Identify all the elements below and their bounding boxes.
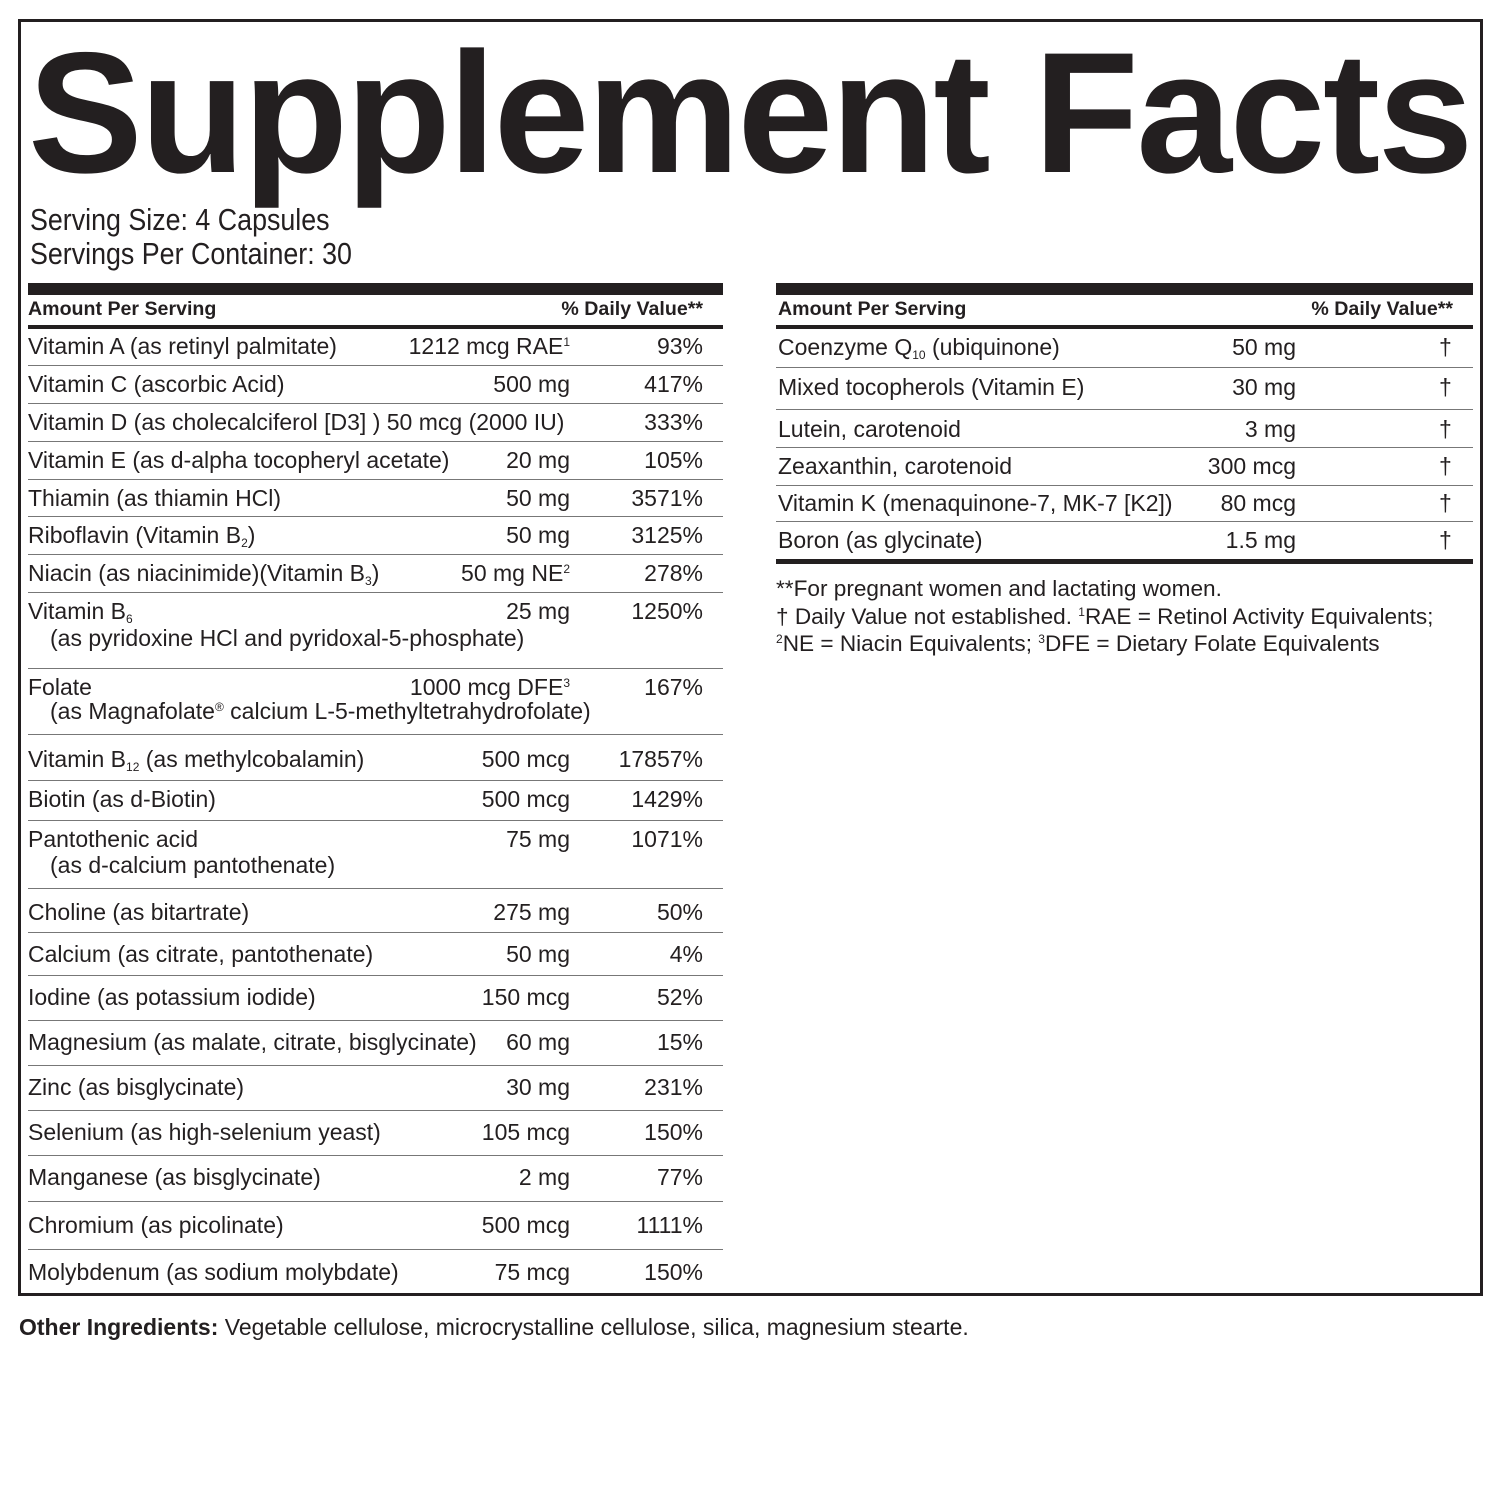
panel: left table: 20 mg xyxy=(506,447,570,473)
panel: left table: Vitamin E (as d-alpha tocopheryl acetate) xyxy=(28,447,449,473)
panel: left table: Selenium (as high-selenium yeast) xyxy=(28,1119,381,1145)
panel: left table: Zinc (as bisglycinate) xyxy=(28,1074,244,1100)
panel: left table: Pantothenic acid xyxy=(28,826,198,852)
panel: left table: 278% xyxy=(644,560,703,586)
panel: right table: Zeaxanthin, carotenoid xyxy=(778,453,1012,479)
panel: left table: 25 mg xyxy=(506,598,570,624)
panel: left table: 1212 mcg RAE1 xyxy=(409,333,570,359)
panel: left table: Magnesium (as malate, citrate, bisglycinate) xyxy=(28,1029,477,1055)
panel: left table: 500 mcg xyxy=(482,1212,570,1238)
panel: left table: Choline (as bitartrate) xyxy=(28,899,249,925)
panel: right table: Mixed tocopherols (Vitamin E) xyxy=(778,374,1084,400)
panel: right table: 1.5 mg xyxy=(1226,527,1296,553)
panel: left table: Manganese (as bisglycinate) xyxy=(28,1164,321,1190)
footnotes: 2NE = Niacin Equivalents; 3DFE = Dietary Folate Equivalents xyxy=(776,631,1380,656)
panel: left table: 1000 mcg DFE3 xyxy=(410,674,570,700)
serving info xyxy=(30,202,352,271)
panel: left table: 417% xyxy=(644,371,703,397)
panel: left table: 150% xyxy=(644,1119,703,1145)
panel: left table: Niacin (as niacinimide)(Vitamin B3) xyxy=(28,560,379,588)
panel: right table: † xyxy=(1439,527,1452,553)
panel: left table: Vitamin C (ascorbic Acid) xyxy=(28,371,284,397)
panel: left table: 75 mcg xyxy=(495,1259,570,1285)
panel: left table: 77% xyxy=(657,1164,703,1190)
panel: left table: 3125% xyxy=(631,522,703,548)
panel: left table: 167% xyxy=(644,674,703,700)
panel: left table: 4% xyxy=(670,941,703,967)
panel: left table: 60 mg xyxy=(506,1029,570,1055)
panel: left table: 50 mg NE2 xyxy=(461,560,570,586)
panel: right table: † xyxy=(1439,334,1452,360)
panel: right table: Boron (as glycinate) xyxy=(778,527,983,553)
panel: left table: Thiamin (as thiamin HCl) xyxy=(28,485,281,511)
panel: left table: (as pyridoxine HCl and pyridoxal-5-phosphate) xyxy=(50,625,524,651)
footnotes xyxy=(776,576,1433,656)
panel: left table: 105 mcg xyxy=(482,1119,570,1145)
panel: right table: Coenzyme Q10 (ubiquinone) xyxy=(778,334,1060,362)
panel: left table: 30 mg xyxy=(506,1074,570,1100)
footnotes: **For pregnant women and lactating women. xyxy=(776,576,1222,601)
panel: right table: Lutein, carotenoid xyxy=(778,416,961,442)
panel: left table: Vitamin D (as cholecalciferol [D3] ) 50 mcg (2000 IU) xyxy=(28,409,564,435)
panel: left table: 50 mg xyxy=(506,485,570,511)
other ingredients: Other Ingredients: Vegetable cellulose, microcrystalline cellulose, silica, magnesium stearte. xyxy=(19,1314,969,1340)
panel: left table: 50 mg xyxy=(506,522,570,548)
panel: left table: 500 mg xyxy=(493,371,570,397)
panel: left table: 1071% xyxy=(631,826,703,852)
panel: left table: Vitamin B12 (as methylcobalamin) xyxy=(28,746,364,774)
panel: left table: % Daily Value** xyxy=(561,298,703,320)
panel: left table: 3571% xyxy=(631,485,703,511)
panel: left table: Riboflavin (Vitamin B2) xyxy=(28,522,255,550)
panel: left table: Folate xyxy=(28,674,92,700)
panel: right table: 80 mcg xyxy=(1221,490,1296,516)
panel: left table: 93% xyxy=(657,333,703,359)
serving info: Serving Size: 4 Capsules xyxy=(30,202,330,237)
panel: left table: 333% xyxy=(644,409,703,435)
panel: left table: 500 mcg xyxy=(482,786,570,812)
panel: left table: 1250% xyxy=(631,598,703,624)
panel: left table: 50% xyxy=(657,899,703,925)
title: Supplement Facts xyxy=(28,17,1471,209)
panel: right table: † xyxy=(1439,490,1452,516)
panel: left table: 50 mg xyxy=(506,941,570,967)
footnotes: † Daily Value not established. 1RAE = Retinol Activity Equivalents; xyxy=(776,604,1433,628)
panel: left table: 15% xyxy=(657,1029,703,1055)
panel: left table: Vitamin A (as retinyl palmitate) xyxy=(28,333,337,359)
panel: right table: Vitamin K (menaquinone-7, MK-7 [K2]) xyxy=(778,490,1173,516)
panel: left table: 231% xyxy=(644,1074,703,1100)
panel: right table: † xyxy=(1439,453,1452,479)
panel: left table: 275 mg xyxy=(493,899,570,925)
panel: left table: Vitamin B6 xyxy=(28,598,133,626)
panel: left table: (as Magnafolate® calcium L-5-methyltetrahydrofolate) xyxy=(50,698,591,724)
panel: left table xyxy=(28,283,723,1285)
panel: left table: 2 mg xyxy=(519,1164,570,1190)
panel: left table: Iodine (as potassium iodide) xyxy=(28,984,316,1010)
panel: left table: 52% xyxy=(657,984,703,1010)
panel: left table: Chromium (as picolinate) xyxy=(28,1212,284,1238)
serving info: Servings Per Container: 30 xyxy=(30,236,352,271)
panel: left table: 1111% xyxy=(636,1212,703,1238)
panel: left table: Biotin (as d-Biotin) xyxy=(28,786,216,812)
panel: left table: 105% xyxy=(644,447,703,473)
panel: right table: 3 mg xyxy=(1245,416,1296,442)
panel: left table: Amount Per Serving xyxy=(28,298,216,320)
panel: right table: † xyxy=(1439,416,1452,442)
panel: right table: † xyxy=(1439,374,1452,400)
panel: right table: 30 mg xyxy=(1232,374,1296,400)
panel: left table: 1429% xyxy=(631,786,703,812)
panel: right table: % Daily Value** xyxy=(1311,298,1453,320)
panel: right table: 50 mg xyxy=(1232,334,1296,360)
panel: left table: Calcium (as citrate, pantothenate) xyxy=(28,941,373,967)
panel: right table: Amount Per Serving xyxy=(778,298,966,320)
panel: right table: 300 mcg xyxy=(1208,453,1296,479)
panel: right table xyxy=(776,283,1473,564)
panel: left table: 75 mg xyxy=(506,826,570,852)
panel: left table: 150 mcg xyxy=(482,984,570,1010)
panel: left table: 17857% xyxy=(619,746,703,772)
panel: left table: (as d-calcium pantothenate) xyxy=(50,852,335,878)
panel: left table: 500 mcg xyxy=(482,746,570,772)
panel: left table: 150% xyxy=(644,1259,703,1285)
panel: left table: Molybdenum (as sodium molybdate) xyxy=(28,1259,399,1285)
